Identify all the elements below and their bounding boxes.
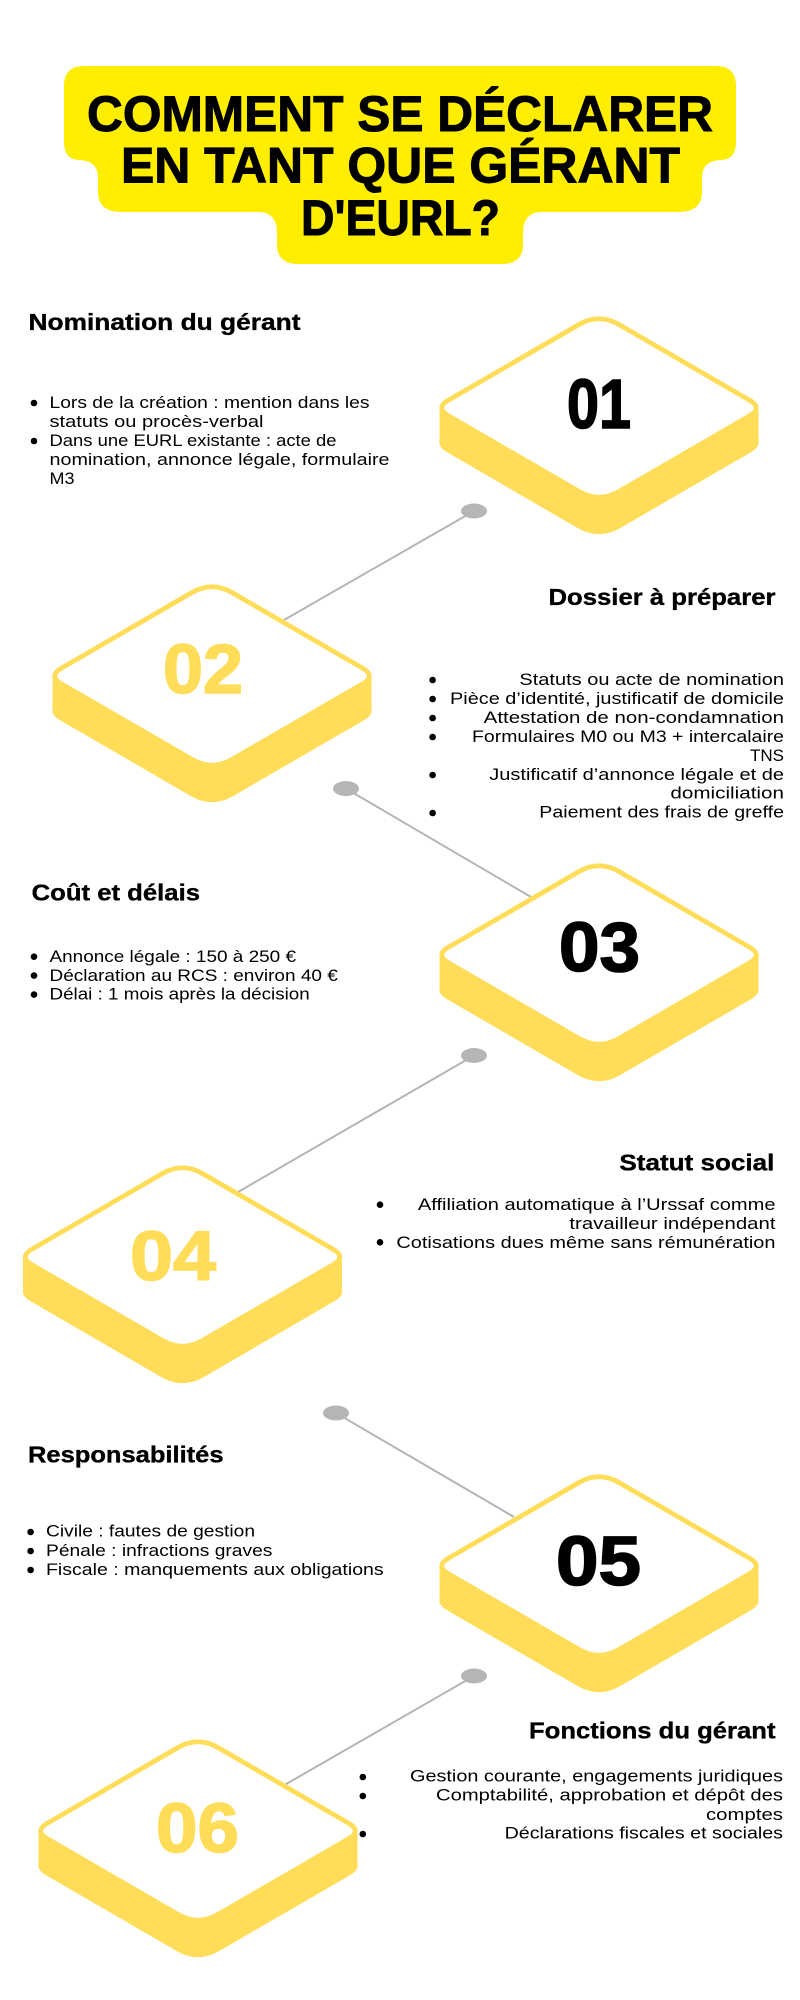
- connector 4: [323, 1406, 514, 1517]
- panel: responsabilités: Civile : fautes de gestion: [46, 1523, 255, 1541]
- panel: statut social: Cotisations dues même sans rémunération: [396, 1234, 776, 1252]
- connector 3: [238, 1048, 487, 1192]
- connector 1: [284, 504, 487, 620]
- panel: statut social: Affiliation automatique à l’Urssaf comme: [418, 1196, 776, 1214]
- panel: responsabilités: Pénale : infractions graves: [46, 1542, 272, 1560]
- connector 5: [286, 1668, 487, 1784]
- panel: fonctions du gérant: Déclarations fiscales et sociales: [505, 1825, 783, 1843]
- panel: dossier à préparer: Statuts ou acte de nomination: [519, 671, 784, 689]
- step 02 block: [52, 587, 372, 800]
- step 03 block: 03: [559, 908, 640, 986]
- panel: nomination du gérant: Dans une EURL existante : acte de: [50, 432, 336, 450]
- step 03 block: [440, 866, 758, 1079]
- panel: fonctions du gérant: comptes: [706, 1806, 783, 1824]
- panel: fonctions du gérant: Gestion courante, engagements juridiques: [410, 1768, 783, 1786]
- panel: responsabilités: Responsabilités: [28, 1442, 223, 1468]
- panel: coût et délais: [31, 880, 338, 1004]
- step 04 block: [23, 1168, 342, 1381]
- panel: dossier à préparer: Formulaires M0 ou M3 + intercalaire: [472, 728, 784, 746]
- title banner: [64, 66, 736, 264]
- step 01 block: 01: [567, 365, 631, 443]
- panel: statut social: travailleur indépendant: [569, 1215, 776, 1233]
- step 06 block: 06: [156, 1789, 239, 1867]
- step 02 block: 02: [163, 630, 243, 708]
- panel: responsabilités: Fiscale : manquements aux obligations: [46, 1561, 384, 1579]
- panel: nomination du gérant: statuts ou procès-verbal: [50, 413, 264, 431]
- step 05 block: 05: [556, 1522, 641, 1600]
- panel: fonctions du gérant: Comptabilité, approbation et dépôt des: [436, 1787, 783, 1805]
- panel: fonctions du gérant: Fonctions du gérant: [529, 1718, 776, 1744]
- panel: statut social: Statut social: [619, 1150, 774, 1176]
- panel: nomination du gérant: Nomination du gérant: [28, 309, 301, 335]
- panel: coût et délais: Délai : 1 mois après la décision: [50, 986, 310, 1004]
- connector 2: [333, 781, 531, 897]
- title banner: EN TANT QUE GÉRANT: [121, 138, 680, 194]
- step 01 block: [440, 319, 758, 532]
- panel: coût et délais: Coût et délais: [32, 880, 200, 906]
- panel: nomination du gérant: Lors de la création : mention dans les: [50, 394, 370, 412]
- step 06 block: [38, 1742, 358, 1955]
- panel: dossier à préparer: Justificatif d’annonce légale et de: [489, 766, 784, 784]
- panel: responsabilités: [27, 1442, 384, 1579]
- panel: nomination du gérant: nomination, annonce légale, formulaire: [50, 451, 390, 469]
- panel: dossier à préparer: Pièce d’identité, justificatif de domicile: [450, 690, 784, 708]
- panel: dossier à préparer: domiciliation: [670, 785, 784, 803]
- panel: dossier à préparer: Attestation de non-condamnation: [484, 709, 784, 727]
- panel: dossier à préparer: Dossier à préparer: [548, 584, 776, 610]
- title banner: D'EURL?: [301, 190, 500, 246]
- panel: nomination du gérant: M3: [50, 470, 74, 488]
- panel: statut social: [377, 1150, 776, 1252]
- title banner: COMMENT SE DÉCLARER: [87, 86, 713, 142]
- step 05 block: [440, 1477, 758, 1690]
- panel: coût et délais: Déclaration au RCS : environ 40 €: [50, 967, 338, 985]
- panel: dossier à préparer: [429, 584, 784, 822]
- step 04 block: 04: [130, 1217, 216, 1295]
- panel: fonctions du gérant: [360, 1718, 783, 1843]
- panel: coût et délais: Annonce légale : 150 à 250 €: [50, 948, 296, 966]
- panel: dossier à préparer: TNS: [750, 747, 784, 765]
- panel: dossier à préparer: Paiement des frais de greffe: [539, 804, 784, 822]
- panel: nomination du gérant: [28, 309, 390, 488]
